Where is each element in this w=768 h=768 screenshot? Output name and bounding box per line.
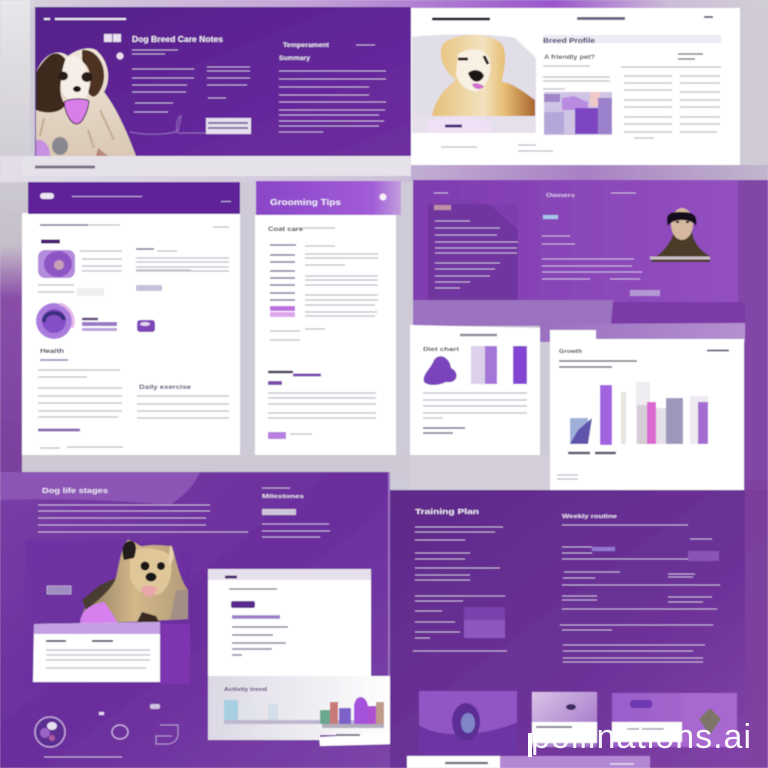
purple tag — [268, 381, 282, 385]
row two — [562, 572, 720, 585]
side subheading: Milestones — [262, 494, 304, 500]
column note — [611, 192, 636, 194]
sheet header — [432, 18, 490, 20]
footer line — [44, 756, 122, 758]
panel: middle white sheet — [255, 181, 401, 455]
footnote — [557, 475, 578, 479]
icon: purple ring — [36, 303, 73, 339]
bottom tab — [407, 756, 650, 768]
section heading with band — [543, 35, 721, 45]
sheet header right — [704, 16, 713, 18]
subheading: A friendly pet? — [544, 54, 595, 61]
right paragraph — [137, 396, 229, 418]
tile: purple badge — [419, 691, 517, 755]
tile: lilac card — [532, 692, 597, 747]
side heading — [262, 487, 290, 489]
caption under swirl — [38, 285, 104, 296]
icon: purple swirl tile — [38, 250, 75, 278]
skyline chart card — [208, 676, 396, 740]
caption card — [319, 733, 396, 746]
icon: purple medallion — [35, 717, 65, 747]
tile: purple caption card — [612, 693, 683, 747]
small title — [434, 192, 448, 194]
photo: golden dog — [412, 34, 536, 133]
sheet header: Grooming Tips — [270, 198, 342, 207]
left column lines — [415, 527, 505, 601]
intro lines — [543, 66, 721, 89]
blue tag — [543, 215, 558, 219]
portrait: person with dark beanie — [650, 208, 710, 262]
icon: cup outline — [156, 725, 178, 744]
watermark: pollinations.ai — [531, 718, 751, 756]
chart heading: Growth — [559, 349, 583, 355]
row one — [562, 547, 719, 561]
text column — [435, 221, 518, 288]
panel: chart card — [550, 330, 744, 490]
bar chart — [471, 346, 527, 384]
small label — [41, 240, 60, 244]
icon: badges — [104, 34, 124, 60]
banner inset box — [206, 118, 251, 134]
caption group — [270, 329, 325, 340]
sheet header centre — [577, 17, 625, 20]
label strip under banner — [22, 156, 411, 176]
chart title: Activity trend — [224, 687, 267, 693]
icon: feather sketch — [130, 116, 206, 134]
sheet header — [28, 182, 240, 214]
purple note — [38, 428, 80, 432]
panel: left white sheet — [22, 182, 240, 455]
name tag — [630, 290, 660, 296]
list labels — [270, 245, 296, 300]
banner text column 2 — [207, 67, 250, 98]
right column body text — [279, 71, 386, 132]
side tag — [262, 509, 296, 515]
side lines — [262, 524, 330, 537]
pill label — [427, 118, 492, 133]
section heading with band: Breed Profile — [543, 36, 595, 45]
panel: bottom left purple — [0, 472, 396, 768]
right column heading: Temperament — [283, 42, 330, 49]
header strip — [44, 18, 126, 20]
left column short lines — [413, 611, 507, 651]
lower tag — [268, 432, 312, 439]
chart intro — [559, 361, 637, 367]
banner subheading — [132, 50, 178, 54]
right paragraph — [305, 246, 378, 316]
right column intro — [562, 525, 712, 539]
heading and lines right — [136, 249, 229, 271]
block heading: Dog life stages — [42, 488, 108, 495]
panel: top right white sheet — [411, 8, 740, 165]
side note — [678, 54, 703, 59]
panel: bars card — [410, 325, 540, 455]
left column shaded block — [464, 607, 505, 638]
card label — [460, 334, 497, 336]
right block left heading: Training Plan — [415, 507, 479, 516]
chart — [570, 382, 708, 445]
lower heading — [268, 372, 321, 375]
highlighted list block — [270, 306, 295, 317]
right column subheading: Summary — [279, 56, 311, 62]
text lines — [542, 236, 642, 279]
icon: small tag — [99, 704, 160, 715]
right column tag — [356, 44, 375, 46]
card note — [423, 428, 465, 433]
column heading: Owners — [546, 193, 575, 199]
paragraph — [560, 625, 713, 662]
sheet title: Coat care — [268, 226, 303, 233]
white info card — [208, 569, 371, 676]
section subtitle — [40, 359, 68, 361]
skyline bars — [224, 697, 384, 728]
right heading: Daily exercise — [139, 385, 192, 391]
ring caption — [82, 319, 117, 331]
row three — [562, 596, 717, 609]
white note card — [33, 622, 160, 682]
icon: purple blob — [424, 356, 457, 385]
icon: purple cloud tile — [137, 320, 155, 332]
right column heading: Weekly routine — [562, 514, 618, 520]
top line — [40, 224, 88, 226]
icon: ring outline — [112, 725, 128, 739]
tile: medal — [683, 693, 737, 747]
lower lilac bands — [413, 300, 745, 342]
block paragraph — [38, 505, 248, 532]
divider text — [38, 370, 120, 377]
footer notes — [441, 145, 553, 151]
panel: top left purple banner — [35, 7, 411, 156]
panel: bottom right purple — [390, 480, 768, 768]
small image tag — [47, 586, 71, 594]
panel: upper right purple profile — [413, 180, 738, 302]
card text — [423, 393, 527, 418]
sheet header — [256, 181, 401, 215]
card heading: Diet chart — [423, 347, 459, 353]
top line extension — [88, 225, 229, 227]
left paragraph — [38, 388, 122, 417]
tag — [434, 205, 451, 210]
small label right — [136, 285, 162, 291]
body text columns — [624, 76, 720, 138]
lower paragraph — [268, 393, 376, 418]
text beside swirl — [80, 251, 122, 271]
chart tag — [707, 350, 729, 352]
footer line — [40, 447, 123, 448]
section heading: Health — [40, 348, 64, 355]
banner heading: Dog Breed Care Notes — [132, 34, 223, 44]
title extension — [303, 227, 335, 229]
thumbnail image — [544, 92, 612, 135]
photo: tan dog — [80, 540, 188, 624]
photo: fluffy brown and white dog — [36, 48, 136, 156]
banner text column 1 — [132, 69, 194, 112]
chart legend — [568, 452, 616, 454]
